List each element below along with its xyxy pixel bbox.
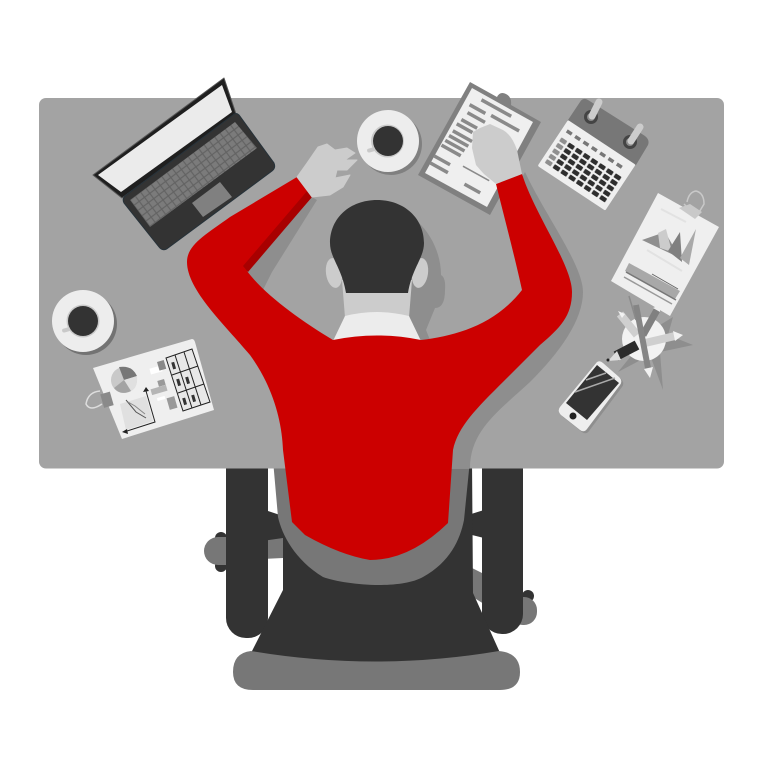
holder shadow xyxy=(618,317,693,390)
line chart xyxy=(120,387,155,434)
calendar muted cells xyxy=(543,136,569,168)
report page xyxy=(611,193,719,316)
chair seat back xyxy=(250,460,501,670)
calendar rings xyxy=(584,102,640,149)
sweater sleeve shade xyxy=(243,190,312,272)
smartphone xyxy=(559,361,623,433)
laptop xyxy=(93,78,275,250)
marker xyxy=(616,345,637,356)
red sweater xyxy=(187,174,572,560)
desk xyxy=(39,98,724,468)
calendar xyxy=(538,99,649,211)
chair posts xyxy=(226,420,523,638)
report with triangle chart xyxy=(611,191,719,316)
laptop base xyxy=(123,114,275,250)
clipboard xyxy=(418,82,541,215)
clipboard page xyxy=(425,88,533,207)
calendar weekday row xyxy=(566,129,623,169)
pie chart xyxy=(111,367,137,393)
legend lines xyxy=(149,360,177,410)
pencil holder xyxy=(606,296,693,390)
screen glare xyxy=(575,373,615,392)
keyboard xyxy=(130,122,257,227)
laptop screen xyxy=(93,78,236,198)
touchpad xyxy=(192,182,232,217)
phone screen xyxy=(566,365,619,420)
shirt collar xyxy=(333,312,421,341)
coffee cup: top xyxy=(357,110,422,175)
holder cup xyxy=(622,317,666,361)
coffee cup: left xyxy=(52,290,117,355)
head shadow xyxy=(405,222,445,345)
chair base xyxy=(233,651,520,690)
hair xyxy=(330,200,424,293)
calendar day cells xyxy=(543,136,623,204)
body shadow on desk xyxy=(440,172,583,468)
calendar sheet and grid xyxy=(538,120,636,211)
document page xyxy=(93,339,214,439)
right hand xyxy=(472,124,522,184)
pencils xyxy=(606,296,683,378)
clipboard text lines xyxy=(429,91,524,196)
ears xyxy=(324,257,430,289)
left hand xyxy=(297,144,357,197)
binder clip xyxy=(679,191,704,219)
chart document xyxy=(86,339,214,439)
triangle chart xyxy=(642,229,696,265)
binder clip xyxy=(86,391,114,408)
report text lines xyxy=(624,209,686,304)
chair arm rests and knobs xyxy=(204,509,537,625)
home button xyxy=(570,412,576,420)
calendar binding xyxy=(568,99,649,165)
arm shadow on desk xyxy=(240,190,317,292)
table xyxy=(166,349,210,411)
neck xyxy=(342,280,412,330)
body shadow on chair xyxy=(273,460,470,585)
